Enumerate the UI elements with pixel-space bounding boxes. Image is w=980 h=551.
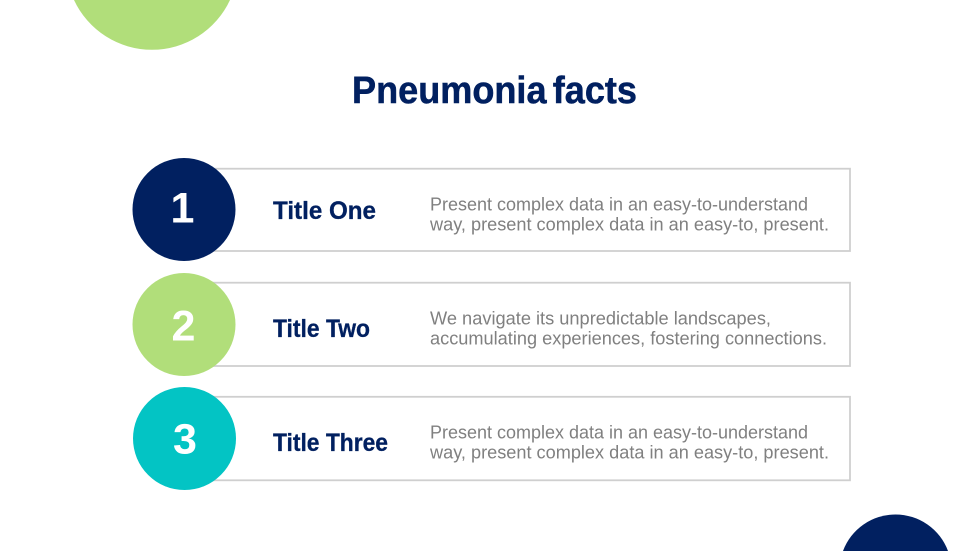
row one heading: Title One [273,197,376,225]
row two number badge [132,273,236,376]
row three description: Present complex data in an easy-to-understand [430,423,808,443]
row three description [429,423,829,463]
panel: row three [133,387,850,490]
row two description: accumulating experiences, fostering connections. [430,329,827,349]
title: Pneumonia facts [352,70,637,112]
row three heading: Title Three [273,429,388,457]
panel: row one [132,158,850,261]
row one number badge: 1 [171,184,194,232]
row one description: way, present complex data in an easy-to, present. [429,215,829,235]
row three number badge: 3 [173,416,197,464]
row two number badge: 2 [172,302,195,350]
row two heading: Title Two [273,315,370,343]
row three box [185,397,850,480]
row one description [429,195,829,235]
row three description: way, present complex data in an easy-to, present. [429,443,829,463]
row one box [184,169,850,251]
row two box [184,283,850,366]
decorative circle: top left [74,0,230,50]
panel: row two [132,273,850,376]
row two description: We navigate its unpredictable landscapes, [430,309,771,329]
row one number badge [132,158,236,261]
decorative circle: bottom right [843,514,948,551]
row one description: Present complex data in an easy-to-understand [430,195,808,215]
row three number badge [133,387,236,490]
row two description [430,309,827,349]
